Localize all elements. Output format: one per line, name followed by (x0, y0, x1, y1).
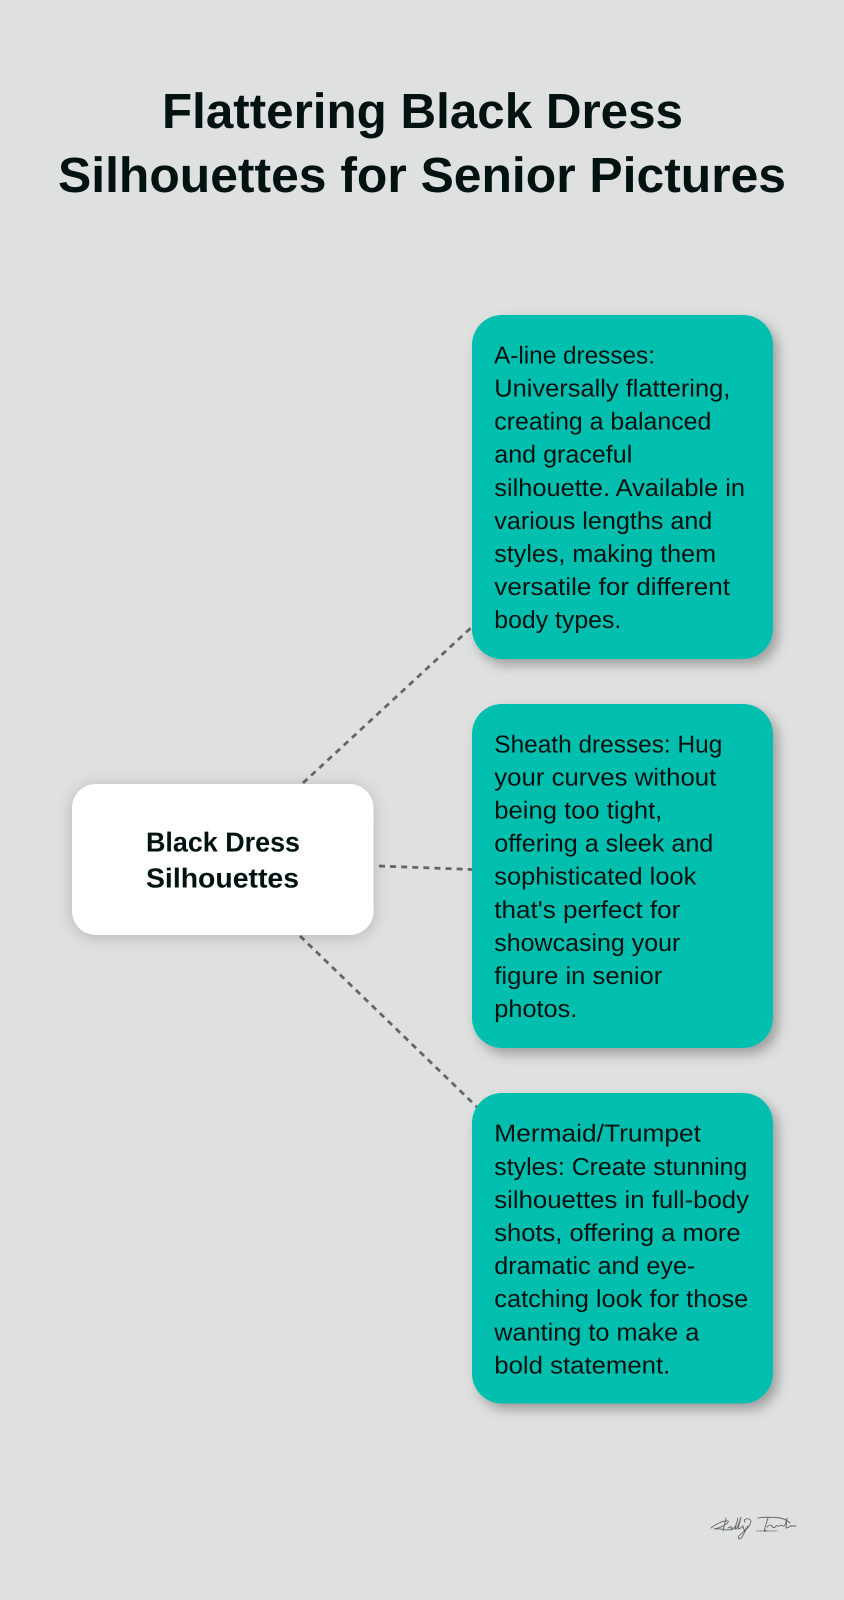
Mermaid text: dramatic and eye- (494, 1253, 695, 1280)
Mermaid text: bold statement. (494, 1352, 670, 1379)
center node label (146, 827, 300, 894)
A-line text: Universally flattering, (494, 376, 730, 402)
Sheath text: Sheath dresses: Hug (494, 731, 722, 758)
A-line text: styles, making them (494, 541, 716, 568)
Mermaid text: catching look for those (494, 1286, 748, 1313)
Mermaid text: styles: Create stunning (494, 1154, 747, 1181)
connector: center to A-line card (303, 625, 474, 783)
connector: center to sheath card (379, 866, 472, 870)
Sheath text: being too tight, (494, 798, 662, 824)
Mermaid text: Mermaid/Trumpet (494, 1121, 701, 1148)
Sheath text: figure in senior (494, 963, 662, 990)
Sheath text: showcasing your (494, 930, 680, 957)
center node label: Silhouettes (146, 863, 299, 894)
Sheath text: photos. (494, 996, 577, 1023)
panel: center node (72, 784, 374, 935)
panel: A-line dresses (472, 315, 773, 659)
Sheath text: your curves without (494, 764, 717, 791)
icon: photographer signature logo (711, 1517, 796, 1539)
title: Silhouettes for Senior Pictures (58, 148, 786, 203)
Mermaid text: silhouettes in full-body (494, 1187, 750, 1214)
A-line text (494, 342, 745, 634)
A-line text: versatile for different (494, 574, 730, 601)
Mermaid text (493, 1121, 750, 1379)
A-line text: silhouette. Available in (494, 475, 745, 502)
A-line text: body types. (494, 607, 621, 634)
signature subtitle: PHOTOGRAPHY (756, 1529, 778, 1533)
A-line text: and graceful (494, 442, 632, 469)
Sheath text: offering a sleek and (494, 831, 713, 858)
A-line text: creating a balanced (494, 409, 711, 436)
center node label: Black Dress (146, 827, 300, 858)
Sheath text (494, 731, 722, 1023)
title (58, 84, 786, 203)
connector: center to mermaid card (300, 936, 478, 1108)
A-line text: A-line dresses: (494, 342, 655, 369)
Mermaid text: wanting to make a (493, 1319, 700, 1346)
Sheath text: that's perfect for (494, 897, 680, 924)
title: Flattering Black Dress (162, 84, 683, 139)
panel: Mermaid/Trumpet styles (472, 1093, 773, 1404)
panel: Sheath dresses (472, 704, 773, 1048)
Sheath text: sophisticated look (494, 864, 697, 891)
A-line text: various lengths and (494, 508, 712, 535)
Mermaid text: shots, offering a more (494, 1220, 741, 1247)
